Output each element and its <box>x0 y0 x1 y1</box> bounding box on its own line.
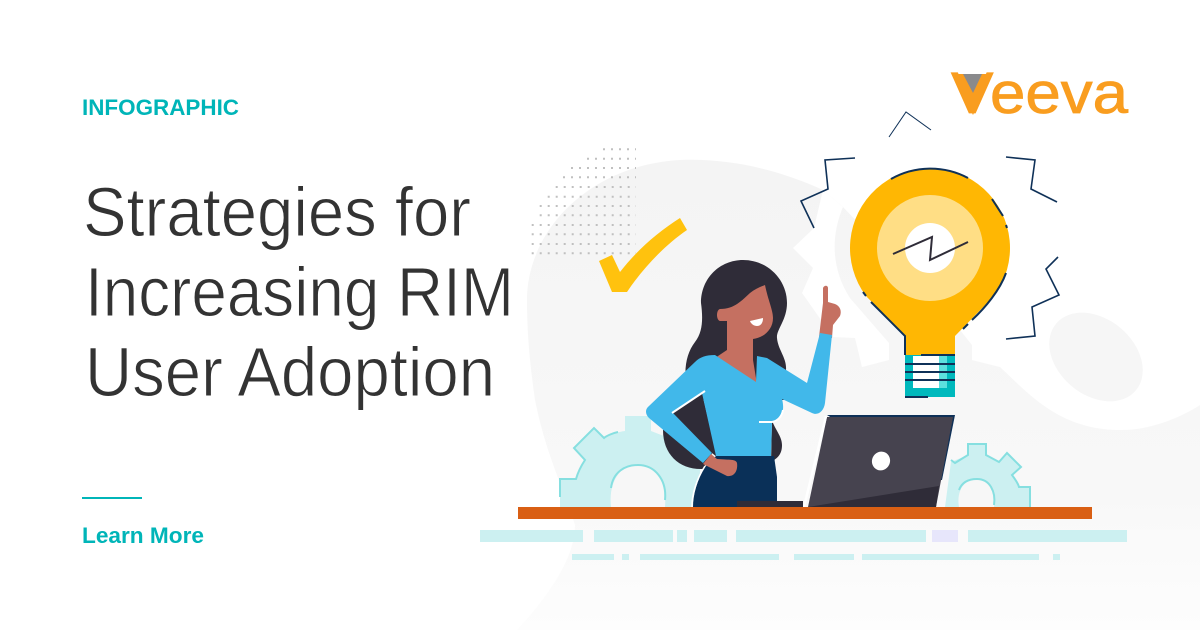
title: User Adoption <box>85 333 495 411</box>
left gear <box>560 416 700 507</box>
smile <box>750 318 763 326</box>
hand on hip <box>703 454 737 476</box>
bulb base <box>905 355 955 397</box>
placeholder text strips <box>480 530 1127 560</box>
table top <box>518 507 1092 519</box>
bulb outline accents <box>863 169 1007 355</box>
learn more link <box>82 497 204 548</box>
blouse highlights <box>672 391 783 422</box>
blue blouse <box>646 333 832 463</box>
title: Increasing RIM <box>85 253 514 331</box>
icon: check mark <box>599 218 687 292</box>
Veeva logo: Veeva <box>951 61 1129 126</box>
learn more link: Learn More <box>82 523 204 548</box>
laptop <box>737 415 955 507</box>
background blob <box>517 160 1200 630</box>
right gear <box>945 444 1030 507</box>
raised hand <box>819 286 841 338</box>
hair <box>663 260 787 469</box>
eyebrow label: INFOGRAPHIC <box>82 95 239 120</box>
pants <box>693 456 777 507</box>
dot pattern <box>532 149 636 253</box>
title: Strategies for <box>83 173 471 251</box>
woman figure <box>646 260 841 507</box>
light bulb <box>850 168 1010 397</box>
title <box>83 173 514 411</box>
neck and face <box>712 285 773 384</box>
spark lines <box>801 112 1059 339</box>
bulb glass <box>850 168 1010 355</box>
filament <box>893 237 968 260</box>
